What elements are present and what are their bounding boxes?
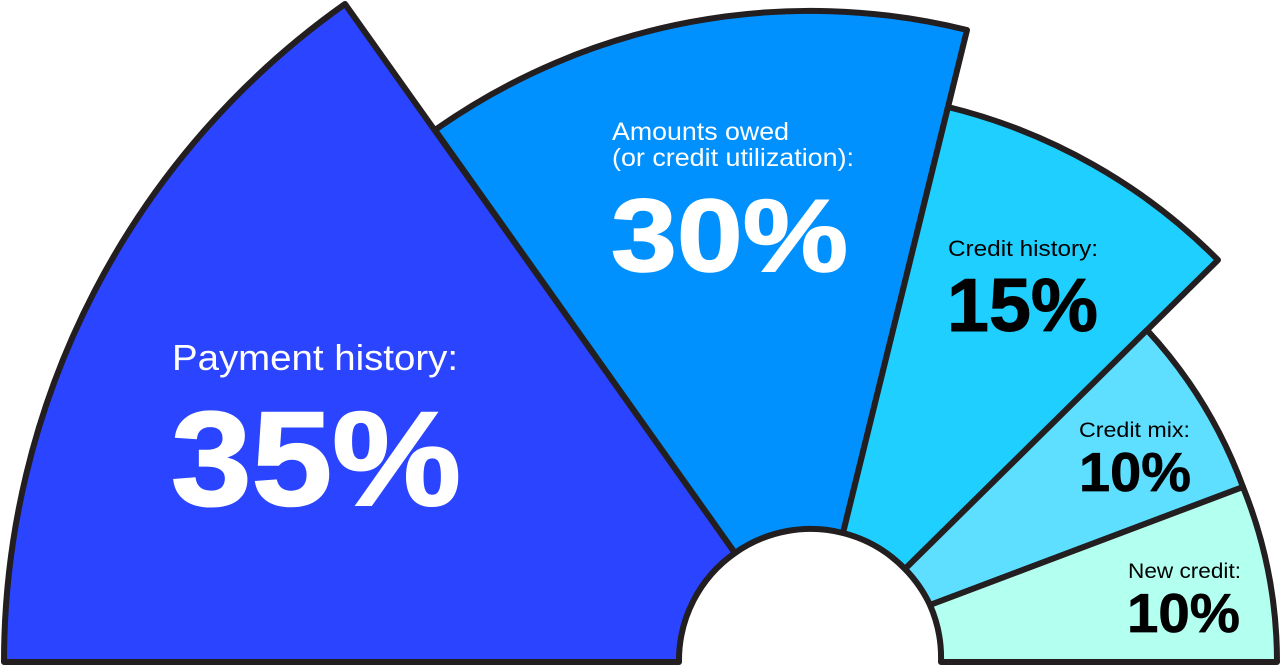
value: 15%: 15% [947, 263, 1098, 347]
value: 10%: 10% [1079, 441, 1191, 503]
label: credit mix: Credit mix: [1079, 419, 1190, 442]
segment: credit mix 10% [905, 330, 1243, 605]
panel: credit mix [905, 330, 1243, 605]
segment: credit history 15% [843, 107, 1218, 569]
panel: amounts owed [435, 11, 967, 553]
segment: amounts owed 30% [435, 11, 967, 553]
value: 30%: 30% [611, 178, 848, 293]
label: credit history: Credit history: [948, 236, 1098, 261]
label: amounts owed: (or credit utilization): [612, 144, 854, 172]
label: payment history: Payment history: [172, 337, 458, 378]
panel: new credit [930, 487, 1277, 662]
segment: new credit 10% [930, 487, 1277, 662]
value: 35%: 35% [171, 385, 461, 534]
panel: credit history [843, 107, 1218, 569]
segment: payment history 35% [4, 4, 735, 662]
label: amounts owed: Amounts owed [612, 118, 789, 146]
label: new credit: New credit: [1128, 560, 1241, 583]
panel: payment history [4, 4, 735, 662]
value: 10%: 10% [1127, 582, 1240, 644]
